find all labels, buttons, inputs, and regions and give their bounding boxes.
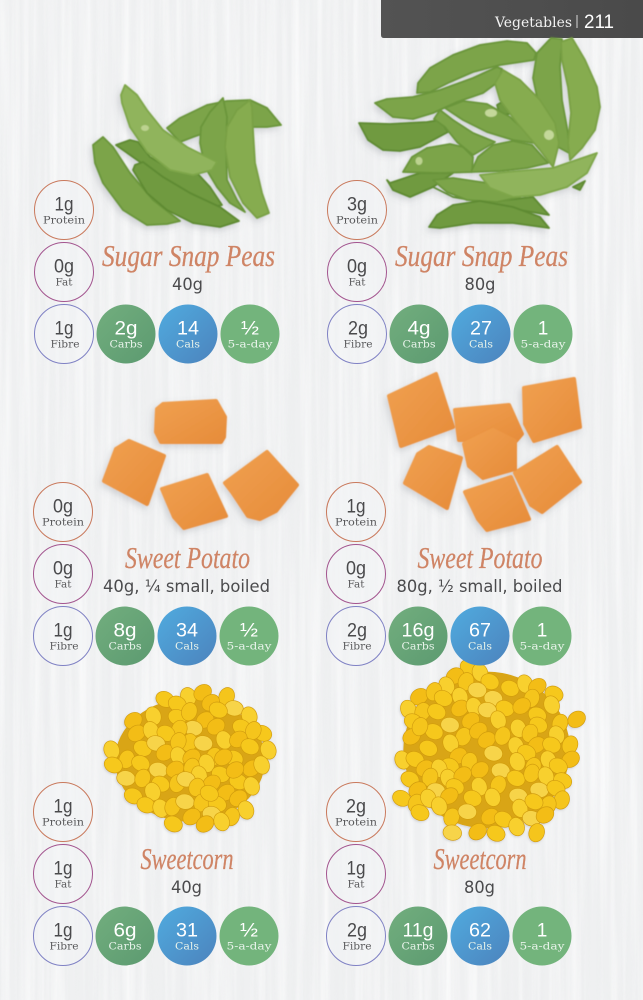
carbs: Carbs	[108, 940, 142, 952]
protein	[34, 782, 92, 842]
carbs: Carbs	[110, 338, 142, 350]
calories: Cals	[468, 640, 492, 652]
header tab: Vegetables	[494, 15, 572, 31]
5-a-day: 5-a-day	[226, 640, 272, 652]
fat: 1g	[346, 858, 366, 880]
calories: Cals	[175, 940, 199, 952]
fat: Fat	[348, 878, 365, 890]
fibre: Fibre	[342, 940, 372, 952]
fat	[34, 844, 92, 904]
fibre	[34, 606, 92, 666]
5-a-day: 1	[537, 620, 547, 642]
fat: 0g	[346, 558, 366, 580]
carbs: 16g	[402, 620, 434, 642]
protein: 1g	[54, 194, 74, 216]
protein	[326, 482, 386, 542]
5-a-day	[512, 906, 572, 966]
carbs: 8g	[114, 620, 136, 642]
image: sweetcorn 80g	[390, 656, 589, 844]
panel: sweet potato 40g	[34, 482, 278, 666]
5-a-day: 5-a-day	[228, 338, 273, 350]
protein: 3g	[347, 194, 367, 216]
carbs: 2g	[114, 318, 138, 340]
fibre: Fibre	[50, 338, 80, 350]
portion: 40g	[171, 878, 202, 898]
fibre: 2g	[347, 920, 367, 942]
carbs	[388, 906, 448, 966]
protein: 1g	[54, 796, 72, 818]
calories	[158, 304, 218, 364]
fat: 0g	[347, 256, 367, 278]
title: Sweet Potato	[125, 540, 250, 575]
fibre: Fibre	[50, 640, 78, 652]
title: Sweet Potato	[418, 540, 542, 575]
calories: 34	[176, 620, 198, 642]
fibre	[326, 906, 386, 966]
protein: Protein	[42, 816, 84, 828]
5-a-day: 5-a-day	[520, 338, 566, 350]
fat: Fat	[348, 276, 366, 288]
image: sweet potato 40g	[104, 401, 297, 528]
header tab	[381, 0, 643, 38]
carbs: 11g	[402, 920, 434, 942]
5-a-day: ½	[241, 318, 259, 340]
carbs: 6g	[114, 920, 136, 942]
carbs	[390, 304, 448, 364]
fat	[34, 544, 92, 604]
fat	[326, 844, 386, 904]
fat	[326, 544, 386, 604]
panel: sweet potato 80g	[326, 482, 572, 666]
carbs	[96, 606, 154, 666]
fat: 1g	[54, 858, 72, 880]
title: Sugar Snap Peas	[395, 238, 568, 273]
portion: 80g	[464, 878, 495, 898]
fibre: 1g	[54, 318, 74, 340]
image: sugar snap peas 80g	[359, 38, 600, 228]
header tab: 211	[584, 12, 614, 33]
carbs: Carbs	[108, 640, 142, 652]
carbs: Carbs	[402, 640, 434, 652]
carbs	[96, 304, 156, 364]
5-a-day: 5-a-day	[520, 640, 565, 652]
fat: Fat	[56, 276, 73, 288]
calories: Cals	[468, 940, 492, 952]
5-a-day: ½	[240, 920, 258, 942]
calories	[450, 606, 510, 666]
5-a-day: 1	[538, 318, 548, 340]
carbs	[388, 606, 448, 666]
portion: 80g, ½ small, boiled	[396, 577, 562, 597]
fat	[328, 242, 386, 302]
fat: 0g	[53, 558, 73, 580]
calories	[450, 906, 510, 966]
title: Sweetcorn	[434, 841, 526, 876]
calories: 14	[177, 318, 199, 340]
5-a-day: 5-a-day	[520, 940, 565, 952]
panel: sweetcorn 80g	[326, 782, 572, 966]
5-a-day	[220, 606, 278, 666]
protein: Protein	[336, 214, 378, 226]
fat	[34, 242, 94, 302]
calories	[158, 606, 216, 666]
fibre	[34, 906, 92, 966]
fibre	[326, 606, 386, 666]
5-a-day	[514, 304, 572, 364]
image: sweet potato 80g	[389, 374, 580, 530]
protein	[328, 180, 386, 240]
fibre: Fibre	[344, 338, 372, 350]
calories	[158, 906, 216, 966]
portion: 80g	[464, 275, 496, 295]
calories: Cals	[175, 640, 199, 652]
fibre	[34, 304, 94, 364]
calories: 67	[469, 620, 491, 642]
fat: Fat	[348, 578, 365, 590]
calories: 31	[176, 920, 198, 942]
title: Sweetcorn	[140, 841, 234, 876]
portion: 40g	[172, 275, 203, 295]
calories: Cals	[469, 338, 493, 350]
fibre: 1g	[54, 920, 72, 942]
panel: sweetcorn 40g	[34, 782, 278, 966]
carbs	[96, 906, 154, 966]
protein: 0g	[53, 496, 73, 518]
portion: 40g, ¼ small, boiled	[103, 577, 270, 597]
carbs: Carbs	[402, 338, 436, 350]
fibre: Fibre	[50, 940, 78, 952]
calories	[452, 304, 510, 364]
carbs: 4g	[408, 318, 430, 340]
fibre: 1g	[54, 620, 72, 642]
fat: Fat	[54, 578, 72, 590]
fibre	[328, 304, 386, 364]
protein	[34, 180, 94, 240]
protein: Protein	[42, 516, 84, 528]
5-a-day	[220, 906, 278, 966]
5-a-day	[220, 304, 280, 364]
carbs: Carbs	[402, 940, 434, 952]
fat: Fat	[54, 878, 72, 890]
fibre: Fibre	[342, 640, 372, 652]
fibre: 2g	[347, 620, 367, 642]
protein: 1g	[346, 496, 366, 518]
panel: sugar snap peas 40g	[34, 180, 280, 364]
5-a-day: ½	[240, 620, 258, 642]
fat: 0g	[54, 256, 74, 278]
calories: Cals	[176, 338, 200, 350]
fibre: 2g	[348, 318, 368, 340]
protein: Protein	[335, 516, 377, 528]
5-a-day: 1	[537, 920, 547, 942]
protein	[326, 782, 386, 842]
5-a-day	[512, 606, 572, 666]
image: sweetcorn 40g	[101, 681, 279, 836]
title: Sugar Snap Peas	[102, 238, 275, 273]
protein	[34, 482, 92, 542]
protein: 2g	[346, 796, 366, 818]
image: sugar snap peas 40g	[93, 85, 281, 227]
protein: Protein	[335, 816, 377, 828]
calories: 62	[469, 920, 491, 942]
protein: Protein	[43, 214, 85, 226]
5-a-day: 5-a-day	[226, 940, 272, 952]
panel: sugar snap peas 80g	[328, 180, 572, 364]
calories: 27	[470, 318, 492, 340]
